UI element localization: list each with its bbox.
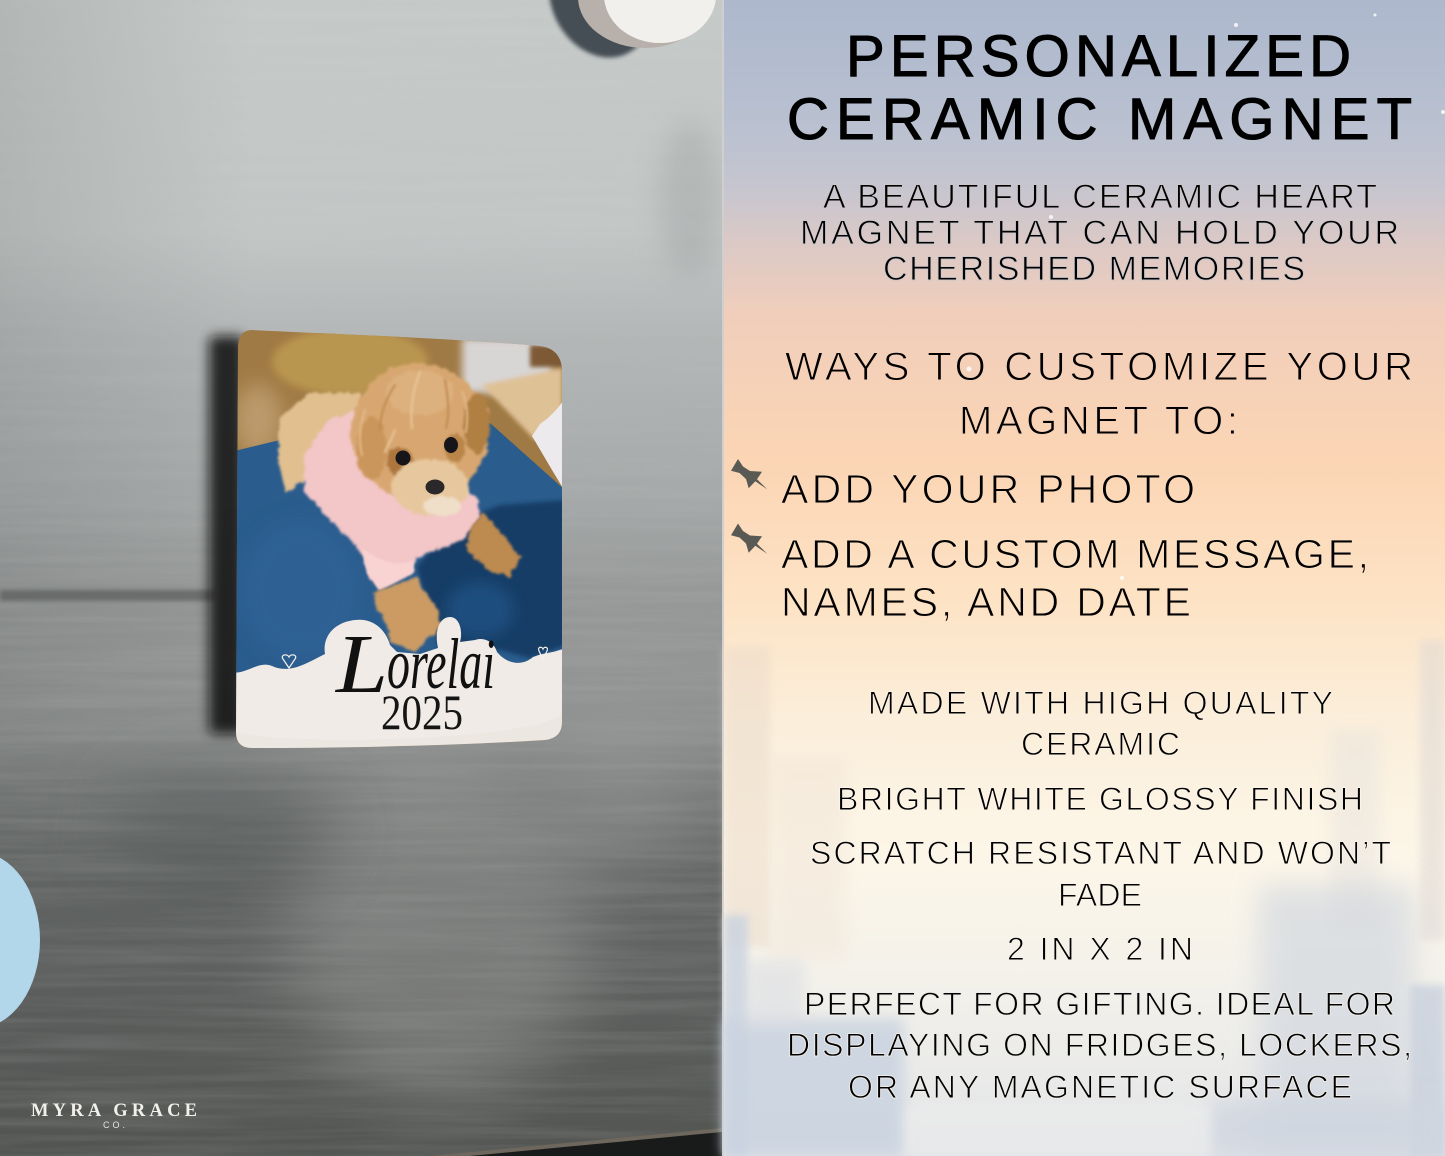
heading: ways to customize: MAGNET TO: <box>959 399 1238 443</box>
feature: perfect for gifting: OR ANY MAGNETIC SURFACE <box>848 1069 1352 1105</box>
subtitle: A BEAUTIFUL CERAMIC HEART <box>823 178 1377 216</box>
puppy rear fur <box>278 393 370 493</box>
puppy head <box>350 363 490 516</box>
feature: scratch resistant <box>810 835 1391 913</box>
feature: high quality ceramic: MADE WITH HIGH QUALITY <box>868 685 1333 721</box>
icon: push pin 1 <box>731 459 768 490</box>
logo: Myra Grace Co. <box>31 1104 196 1128</box>
feature: perfect for gifting: PERFECT FOR GIFTING. IDEAL FOR <box>804 986 1395 1022</box>
list item: add a custom message <box>781 531 1369 625</box>
feature: high quality ceramic <box>868 685 1333 762</box>
icon: push pin 2 <box>731 524 768 554</box>
subtitle <box>800 178 1399 288</box>
ceramic magnet with puppy photo <box>230 325 570 755</box>
shadow behind ceramic magnet <box>209 336 245 734</box>
list item: add your photo: ADD YOUR PHOTO <box>781 466 1195 512</box>
name script: orelai <box>387 624 495 704</box>
blue cushion <box>230 423 565 700</box>
title: CERAMIC MAGNET <box>787 87 1412 152</box>
heading: ways to customize <box>785 345 1413 443</box>
name script <box>334 637 494 692</box>
cushion shadow <box>417 500 566 658</box>
panel: steel fridge photo <box>0 0 722 1156</box>
icon: round white magnet top <box>546 0 716 60</box>
subtitle: CHERISHED MEMORIES <box>883 250 1305 288</box>
icon: round blue magnet left <box>0 852 40 1028</box>
puppy front leg <box>373 577 442 652</box>
logo: Myra Grace Co.: MYRA GRACE <box>31 1101 197 1121</box>
year: 2025 <box>381 684 463 740</box>
feature: glossy finish: BRIGHT WHITE GLOSSY FINISH <box>837 781 1363 817</box>
logo: Myra Grace Co.: CO. <box>103 1120 125 1130</box>
puppy right paw <box>467 513 520 577</box>
white name band <box>230 617 570 755</box>
feature: scratch resistant: SCRATCH RESISTANT AND WON’T <box>810 835 1391 871</box>
feature: scratch resistant: FADE <box>1058 877 1142 913</box>
heading: ways to customize: WAYS TO CUSTOMIZE YOUR <box>785 345 1413 389</box>
feature: high quality ceramic: CERAMIC <box>1021 726 1180 762</box>
puppy pink sweater <box>304 411 481 590</box>
title <box>787 24 1412 152</box>
feature: size: 2 IN X 2 IN <box>1007 931 1193 967</box>
panel: sky background <box>722 0 1445 1156</box>
feature: perfect for gifting <box>787 986 1412 1105</box>
feature: perfect for gifting: DISPLAYING ON FRIDGES, LOCKERS, <box>787 1027 1412 1063</box>
subtitle: MAGNET THAT CAN HOLD YOUR <box>800 214 1399 252</box>
list item: add a custom message: ADD A CUSTOM MESSAGE, <box>781 531 1369 577</box>
title: PERSONALIZED <box>846 24 1351 89</box>
list item: add a custom message: NAMES, AND DATE <box>781 579 1191 625</box>
name script: L <box>335 618 388 711</box>
